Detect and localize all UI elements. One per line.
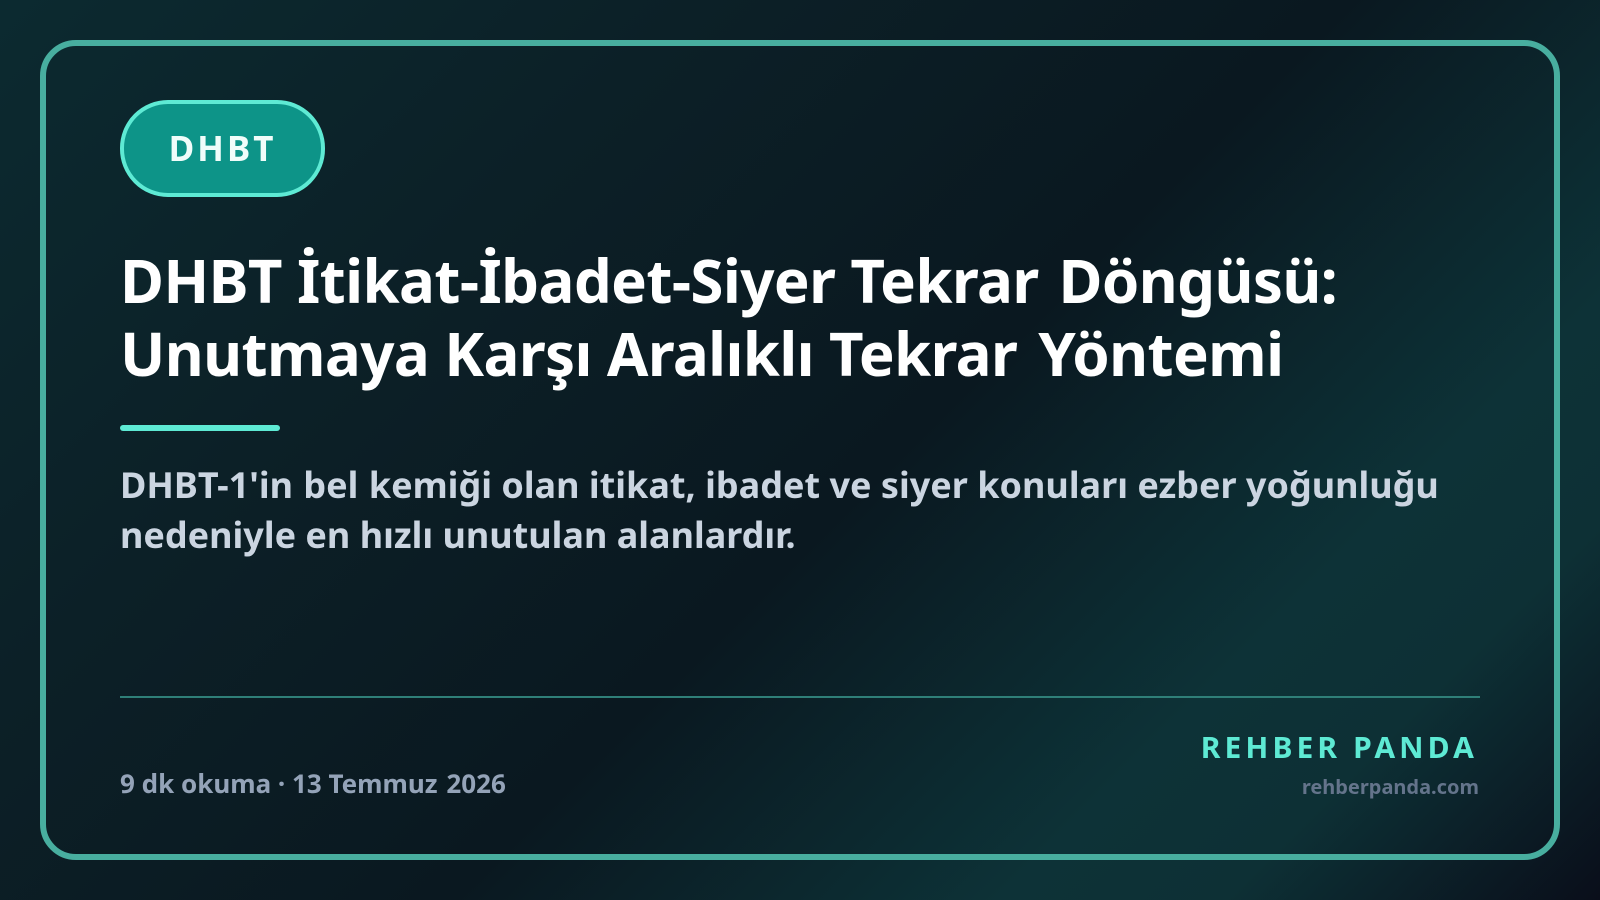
title: Unutmaya Karşı Aralıklı Tekrar Yöntemi — [120, 312, 1283, 394]
badge: DHBT — [120, 100, 325, 197]
badge: DHBT: DHBT — [169, 125, 276, 172]
title — [120, 239, 1337, 394]
title: DHBT İtikat-İbadet-Siyer Tekrar Döngüsü: — [120, 239, 1337, 321]
website: rehberpanda.com — [1302, 773, 1479, 800]
meta: reading time and date: 9 dk okuma · 13 Temmuz 2026 — [120, 765, 506, 801]
subtitle — [120, 460, 1439, 559]
subtitle: nedeniyle en hızlı unutulan alanlardır. — [120, 510, 796, 559]
subtitle: DHBT-1'in bel kemiği olan itikat, ibadet ve siyer konuları ezber yoğunluğu — [120, 460, 1439, 509]
brand name: REHBER PANDA — [1201, 726, 1478, 767]
accent bar — [120, 425, 280, 431]
divider — [120, 696, 1480, 698]
